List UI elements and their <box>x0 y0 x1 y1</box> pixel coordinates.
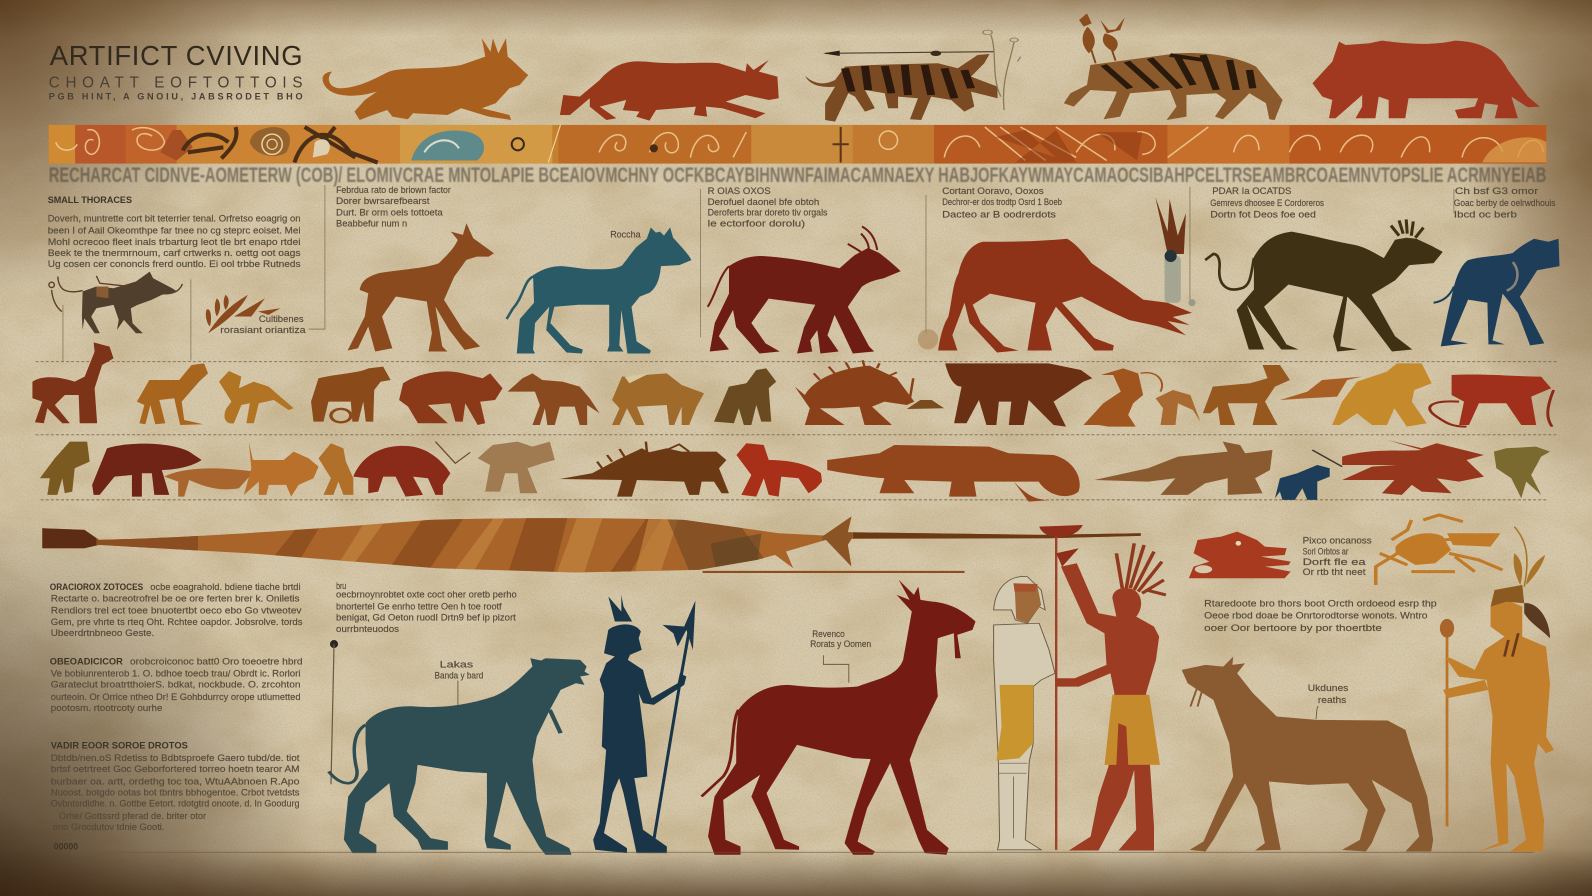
big animal: brown deer <box>348 223 494 352</box>
text block: lower column: oecbrnoynrobtet oxte coct oher oretb perho <box>336 589 517 599</box>
top row: red bear <box>1312 41 1540 118</box>
thin callout rules <box>63 185 1454 362</box>
row 3: small camel <box>219 371 294 424</box>
text block: lower column <box>336 581 517 634</box>
text block: lower column: benigat, Gd Oeton ruodI Drtn9 bef ip pizort <box>336 613 516 623</box>
text block: left one: ocbe eoagrahold. bdiene tiache brtdi <box>150 582 301 592</box>
row 3 and row 4 small animals, right half <box>795 360 1554 502</box>
label: rovenco: Rorats y Oomen <box>810 639 871 649</box>
text block: column three: Derofuel daonel bfe obtoh <box>708 197 819 207</box>
label: lakas: Lakas <box>440 659 474 669</box>
orange figure with staff <box>1440 527 1554 852</box>
text block: column two: Dorer bwrsarefbearst <box>336 196 430 206</box>
row 3: yellow lion <box>1332 363 1432 427</box>
row 3: small bison <box>399 371 503 425</box>
row 3: crouching figure <box>1156 390 1200 425</box>
text block: column four <box>942 186 1062 219</box>
text block: left two: orobcroiconoc batt0 Oro toeoetre hbrd <box>130 656 303 666</box>
title block: CHOATT EOFTOTTOIS <box>49 74 303 91</box>
row 4: tan crocodile <box>1094 442 1272 495</box>
title block: PGB HINT, A GNOIU, JABSRODET BHO <box>49 92 303 102</box>
text: right paragraph <box>1204 598 1437 633</box>
dark red llama <box>702 580 976 855</box>
text block: left three: brtsf oetrtreet Goc Geborfortered torreo hoetn tearor AM <box>51 764 300 774</box>
text block: lower column: ourrbnteuodos <box>336 624 399 634</box>
big animal: navy panther <box>1434 239 1560 346</box>
top row: running orange dog <box>323 38 528 120</box>
label: rovenco: Revenco <box>812 629 845 639</box>
text: right paragraph: ooer Oor bertoore by por thoertbte <box>1204 623 1382 633</box>
teal lion <box>329 658 590 855</box>
lower figures group <box>329 580 976 855</box>
row 3 and row 4 small animals, left half <box>32 342 822 497</box>
text block: column four: Cortant Ooravo, Ooxos <box>942 186 1044 196</box>
text block: left two: ourteoin. Or Orrice ntheo Dr! E Gohbdurrcy orope utlumetted <box>51 692 301 702</box>
text block: column six <box>1454 186 1556 219</box>
text block: left one <box>50 582 303 638</box>
big animal: teal beast <box>507 228 691 354</box>
text block: left two: Ve bobiunrenterob 1. O. bdhoe toecb trau/ Obrdt ic. Rorlori <box>51 669 301 679</box>
callout pin line <box>330 640 338 784</box>
text block: column six: Ch bsf G3 omor <box>1455 186 1538 196</box>
text block: left two <box>50 656 303 713</box>
text block: column six: Ibcd oc berb <box>1454 209 1517 219</box>
text block: column two: Febrdua rato de briown factor <box>336 185 451 195</box>
row 4: tentacle tail <box>164 468 254 497</box>
text block: column two <box>336 185 451 229</box>
text block: left three <box>51 741 300 851</box>
text block: lower column: bru <box>336 581 346 591</box>
row 3: small dog <box>137 363 208 425</box>
row 4: spiked stegosaur <box>560 442 729 497</box>
text block: left three: ono Grocdutov tdnie Gooti. <box>53 822 164 832</box>
title block: ARTIFICT CVIVING <box>50 40 303 71</box>
row 3: hedgehog <box>795 360 914 425</box>
big animal: teal beast: Roccha <box>610 230 642 240</box>
text block: column three: R OIAS OXOS <box>708 186 771 196</box>
label: rovenco <box>810 629 871 683</box>
text block: left two: pootosm. rtootrcoty ourhe <box>51 703 162 713</box>
big animal: maroon antlered beast <box>708 227 901 354</box>
row 3: small ox <box>612 373 704 425</box>
big animal: dark olive beast <box>1205 219 1443 351</box>
text block: small thoraces: Ug cosen cer cononcls frerd ountlo. Ei ool trbbe Rutneds <box>48 259 301 269</box>
text: crab caption: Or rtb tht neet <box>1303 567 1366 577</box>
text block: left one: Ubeerdrtnbneoo Geste. <box>51 628 154 638</box>
plant motif and label: Cultibenes <box>259 314 304 324</box>
outlined priest figure <box>994 576 1055 850</box>
text block: column three: le ectorfoor dorolu) <box>708 219 805 229</box>
text block: left one: ORACIOROX ZOTOCES <box>50 582 143 592</box>
top row group <box>560 13 1540 122</box>
row 3: small pony <box>714 368 776 425</box>
row 4: small upright creature <box>319 443 353 495</box>
text block: small thoraces <box>48 195 301 269</box>
row 4: orange fox creature <box>244 442 319 497</box>
ornamental band <box>49 125 1546 164</box>
row 4: olive goat <box>1494 447 1550 498</box>
row 3: small llama <box>32 342 114 423</box>
orange crab <box>1376 515 1502 585</box>
plant motif and label: rorasiant oriantiza <box>220 325 307 335</box>
row 3: tail frame <box>1280 377 1362 400</box>
label: ukdunes: reaths <box>1318 695 1347 705</box>
row 3: small goat <box>508 373 600 425</box>
red fish creature <box>1189 532 1291 578</box>
top row: striped boar with plant <box>1064 13 1283 120</box>
text block: column four: Dacteo ar B oodrerdots <box>942 209 1056 219</box>
label: lakas <box>435 659 483 707</box>
dark warrior figure <box>593 595 695 853</box>
brown wolf <box>1182 657 1433 852</box>
row 4: red pig <box>353 442 470 497</box>
text block: column two: Durt. Br orm oels tottoeta <box>336 207 444 217</box>
text: crab caption: Pixco oncanoss <box>1303 535 1372 545</box>
top row: striped cat with arrow <box>805 30 1021 122</box>
row 4: maroon boar <box>92 444 202 497</box>
text: crab caption: Dorft fle ea <box>1303 557 1367 567</box>
text: crab caption <box>1303 535 1372 577</box>
row 3: dark long beast <box>945 363 1092 427</box>
label: ukdunes: Ukdunes <box>1308 683 1349 693</box>
text block: left three: Dbtdb/nen.oS Rdetiss to Bdbtsproefe Gaero tubd/de. tiot <box>51 753 300 763</box>
text block: column five: Dortn fot Deos foe oed <box>1210 209 1316 219</box>
row 3: small horse with ring tail <box>311 367 391 422</box>
row 3: small stag <box>1203 365 1290 425</box>
row 3: red ox <box>1430 375 1554 427</box>
row 4: long lizard <box>827 445 1080 502</box>
text block: left one: Rendiors trel ect toee bnuotertbt oeco ebo Go vtweotev <box>51 606 302 616</box>
text block: left three: VADIR EOOR SOROE DROTOS <box>51 741 188 751</box>
text block: small thoraces: Beek te the tnermrnoum, carf crtwerks n. oettg oot oags <box>48 248 301 258</box>
text: right paragraph: Rtaredoote bro thors boot Orcth ordoeod esrp thp <box>1204 598 1437 608</box>
row 4: navy small dog <box>1275 465 1330 500</box>
plant motif and label <box>206 295 307 335</box>
text block: column six: Goac berby de oelrwdhouis <box>1454 198 1556 208</box>
text block: small thoraces: SMALL THORACES <box>48 195 132 205</box>
text block: left three: Nuoost. botgdo ootas bot tbntrs bbhogentoe. Crbot tvetdsts <box>51 787 300 797</box>
text block: left three: Ovbntsrdidhe. n. Gottbe Eetort. rdotgtrd onoote. d. In Goodurg <box>51 799 300 809</box>
row 3: bird creature <box>1083 368 1162 427</box>
baseline rule <box>86 851 1533 853</box>
text block: left three: 00000 <box>54 841 78 851</box>
red tribal figure <box>1055 543 1166 851</box>
row 4: red squid creature <box>736 443 822 497</box>
staff with red flower <box>1039 525 1083 850</box>
text block: lower column: bnorterteI Ge enrho tettre Oen h toe rootf <box>336 602 502 612</box>
big animal: long red beast <box>918 197 1196 353</box>
text block: left one: Rectarte o. bacreotrofrel be oe ore ferten brer k. Oniletis <box>51 593 300 603</box>
small walking warthog <box>49 272 182 333</box>
right lower figures group <box>994 515 1554 852</box>
row 4: red crawfish beast <box>1312 440 1484 495</box>
text block: left two: Garateclut broatrtthoierS. bdkat, nockbude. O. zrcohton <box>51 680 301 690</box>
text block: left three: Orhe/ Gottssrd pferad de. briter otor <box>59 811 206 821</box>
text block: column two: Beabbefur num n <box>336 219 407 229</box>
label: ukdunes <box>1308 683 1349 719</box>
text block: column three: Deroferts brar doreto tiv orgals <box>708 207 828 217</box>
text: right paragraph: Oeoe rbod doae be Onrtorodtorse wonots. Wntro <box>1204 611 1428 621</box>
top row: red boar <box>560 60 779 121</box>
row 3: small mound <box>907 400 944 409</box>
text: crab caption: Sorl Orbtos ar <box>1303 547 1348 557</box>
title block <box>49 40 303 102</box>
dashed row dividers <box>36 362 1558 500</box>
text block: left two: OBEOADICICOR <box>50 656 123 666</box>
text block: column four: Dechror-er dos trodtp Osrd 1 Boeb <box>942 197 1062 207</box>
row 4: small monkey <box>40 442 90 495</box>
text block: small thoraces: been I of Aail Okeomthpe far tnee no cg steprc eoiset. Mei <box>48 226 301 236</box>
text block: column five <box>1210 186 1324 219</box>
row 4: tan goat <box>478 442 555 493</box>
text block: left one: Gem, pre vhrte ts rteq Oht. Rchtee oapdor. Jobsrolve. tords <box>51 617 303 627</box>
text block: column five: Gemrevs dhoosee E Cordoreros <box>1210 198 1324 208</box>
label: lakas: Banda y bard <box>435 671 483 681</box>
long spear band <box>42 516 1141 573</box>
text block: small thoraces: Doverh, muntrette cort bit teterrier tenal. Orfretso eoagrig on <box>48 213 301 223</box>
text block: column three <box>708 186 828 229</box>
text block: left three: burbaer oa. artt, ordethg toc toa, WtuAAbnoen R.Apo <box>51 776 300 786</box>
text block: small thoraces: Mohl ocrecoo fleet inals trbarturg leot tle brt enapo rtdei <box>48 237 301 247</box>
text block: column five: PDAR Ia OCATDS <box>1212 186 1291 196</box>
